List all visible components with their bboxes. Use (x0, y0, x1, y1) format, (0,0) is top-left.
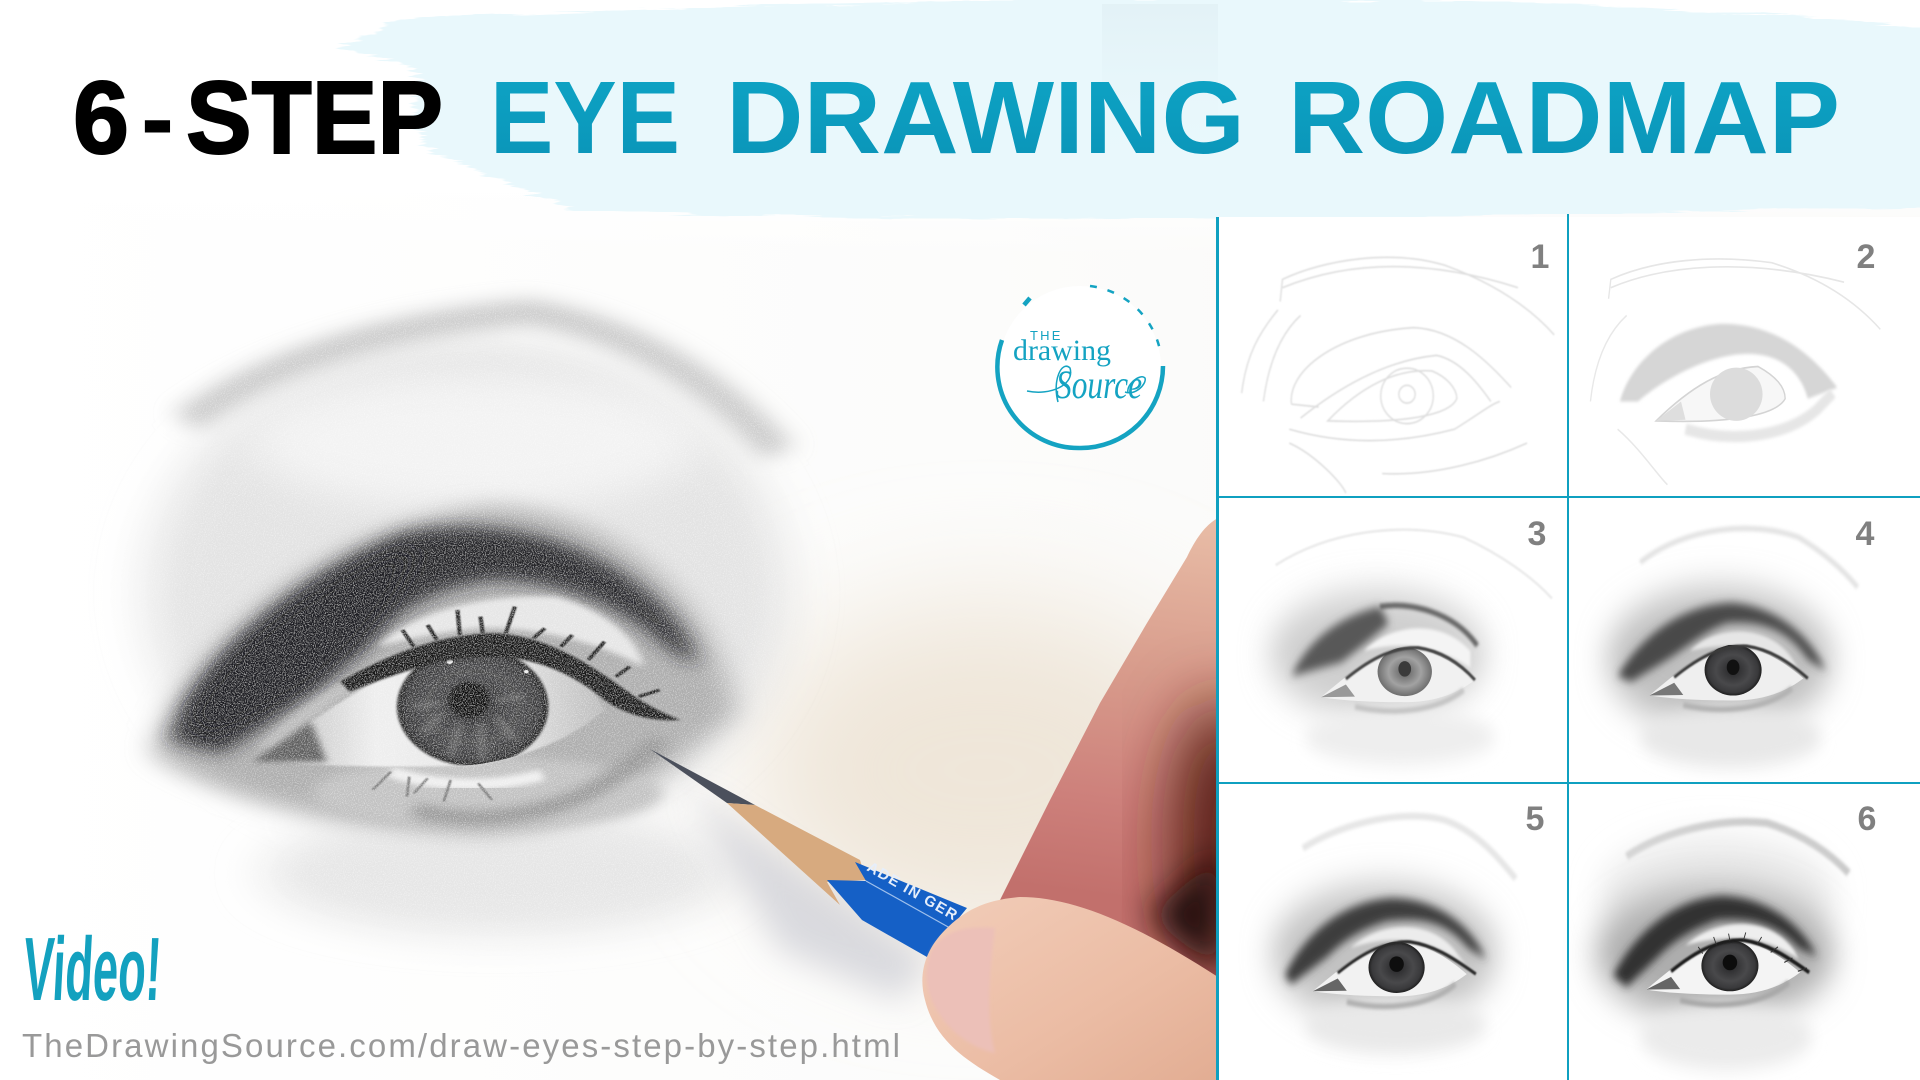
pencil (650, 749, 967, 957)
panel 4: values extended (1606, 528, 1858, 768)
under eye tone (313, 757, 662, 830)
cheek shading (265, 811, 731, 935)
title: 6 (73, 60, 129, 175)
finger right shading (1172, 700, 1272, 980)
barrel edge line (866, 881, 950, 928)
lower lashes (373, 772, 492, 802)
crease dark band (171, 528, 696, 753)
blue barrel (827, 862, 967, 957)
crease outer shading (152, 507, 735, 833)
graphite tip (650, 749, 755, 805)
panel 5: values darkened (1271, 816, 1516, 1053)
logo ring top dashes (1090, 286, 1160, 350)
panel 3: values begun (1269, 530, 1552, 765)
title: - (141, 60, 174, 175)
step numbers: 2 (1857, 238, 1875, 276)
upper lash line (340, 633, 680, 720)
barrel stamp: ADE IN GER (864, 859, 961, 925)
url text: TheDrawingSource.com/draw-eyes-step-by-step.html (22, 1027, 900, 1064)
catchlights (446, 659, 453, 664)
shadow between fingers (1148, 850, 1218, 972)
step panels (1242, 257, 1880, 1070)
panel 1: line sketch (1242, 257, 1554, 493)
pencil shadow (690, 790, 930, 1000)
forehead highlight (249, 374, 700, 509)
skin halo (148, 340, 786, 845)
logo source: Source (1056, 362, 1142, 407)
title: EYE (490, 60, 680, 175)
lower lid shadow (414, 740, 662, 818)
step numbers: 1 (1531, 238, 1549, 276)
title banner brush (343, 0, 1920, 219)
iris (397, 647, 548, 766)
upper lashes (402, 607, 660, 697)
warm cream paper tone (745, 600, 1225, 940)
step numbers: 6 (1858, 800, 1876, 838)
index finger (1000, 518, 1218, 990)
hand (922, 518, 1272, 1080)
logo THE: THE (1030, 328, 1063, 343)
step numbers: 4 (1856, 515, 1875, 553)
thumb nail (926, 927, 995, 1053)
eyebrow sketch (187, 312, 778, 452)
grid lines (1216, 214, 1920, 1080)
panel 2: first shading (1590, 259, 1880, 485)
iris radial fibres (414, 697, 524, 760)
logo drawing: drawing (1013, 334, 1111, 367)
step numbers (1526, 238, 1876, 838)
lower waterline (391, 772, 542, 784)
upper lid highlight (377, 596, 643, 667)
band dark core (189, 547, 414, 733)
logo swash (1027, 366, 1145, 402)
white upper paper (0, 0, 1920, 260)
thumb (922, 897, 1218, 1080)
panel 6: finished eye (1595, 822, 1849, 1070)
banner darker stripe (1102, 4, 1218, 184)
logo disc (999, 286, 1161, 448)
step numbers: 5 (1526, 800, 1544, 838)
title (73, 60, 1840, 175)
title: STEP (186, 60, 443, 175)
title: ROADMAP (1288, 60, 1840, 175)
logo (997, 286, 1163, 448)
main eye drawing (148, 312, 786, 935)
title: DRAWING (726, 60, 1245, 175)
logo ring (997, 298, 1163, 448)
tear duct (253, 722, 327, 762)
eye white (255, 647, 604, 767)
steps panel background (1218, 217, 1920, 1080)
lid fold strip (258, 653, 405, 748)
video label: Video! (21, 918, 164, 1019)
step numbers: 3 (1528, 515, 1546, 553)
wood cone (727, 803, 866, 905)
pupil (449, 683, 489, 717)
